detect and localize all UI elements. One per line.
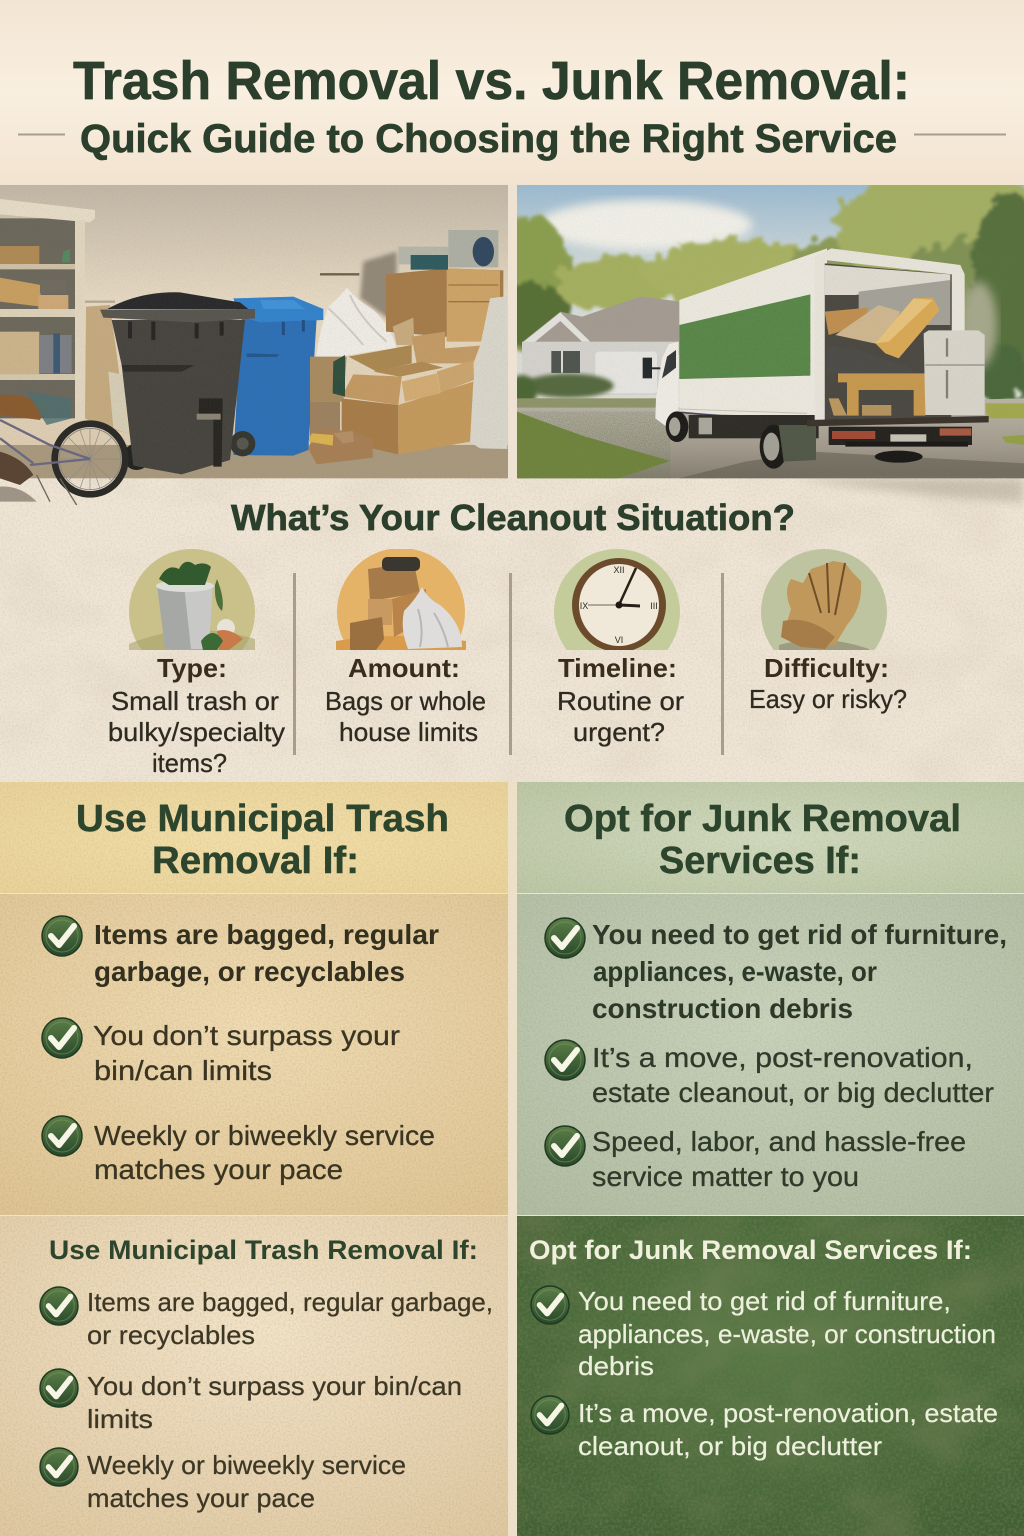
subtitle: Quick Guide to Choosing the Right Service [80, 117, 897, 161]
header band [0, 0, 1024, 186]
item: move: estate cleanout, or big declutter [592, 1077, 994, 1108]
item: bagged: garbage, or recyclables [94, 956, 405, 987]
panel: junk heading [517, 782, 1024, 893]
panel: municipal heading [0, 782, 508, 893]
icon: clock: IX [580, 601, 588, 611]
divider [721, 573, 724, 755]
label: difficulty: Easy or risky? [749, 684, 907, 714]
item: speed: Speed, labor, and hassle-free [592, 1126, 966, 1157]
road [517, 398, 1024, 478]
panel: junk heading: Opt for Junk Removal [564, 798, 961, 840]
item: speed: service matter to you [592, 1161, 859, 1192]
panel: junk list [517, 894, 1024, 1215]
item: furniture: You need to get rid of furniture, [578, 1286, 951, 1316]
icon: clock: XII [613, 565, 625, 575]
label: timeline: Timeline: [558, 653, 677, 683]
mattress [470, 296, 508, 449]
column gutter [508, 782, 517, 1536]
icon: clock: VI [615, 635, 623, 645]
deck and rear lights [807, 416, 989, 426]
item: limits [40, 1369, 462, 1434]
white bag [316, 288, 397, 358]
black bin [127, 444, 144, 470]
fridge [924, 330, 985, 415]
item: bagged [42, 916, 439, 987]
icon: clock: III [650, 601, 658, 611]
truck cab [655, 342, 679, 428]
label: amount: Bags or whole [325, 686, 486, 716]
item: move [545, 1040, 994, 1108]
item: bagged [40, 1287, 493, 1350]
item: schedule: matches your pace [94, 1154, 343, 1185]
item: move: It’s a move, post-renovation, estate [578, 1398, 998, 1428]
filing cabinet [386, 268, 503, 342]
bicycle [0, 420, 125, 505]
item: furniture: appliances, e-waste, or construction [578, 1319, 996, 1349]
item: schedule: matches your pace [87, 1483, 315, 1513]
label: amount [325, 653, 486, 747]
label: timeline [557, 653, 684, 747]
label: amount: Amount: [348, 653, 460, 683]
photo: trash bins and clutter [0, 185, 512, 505]
house [522, 297, 680, 355]
situation background [0, 478, 1024, 782]
summary heading: Opt for Junk Removal Services If: [529, 1235, 972, 1265]
item: furniture: debris [578, 1351, 654, 1381]
label: type [108, 653, 285, 778]
item: furniture [531, 1286, 996, 1381]
label: timeline: Routine or [557, 686, 684, 716]
label: type: bulky/specialty [108, 717, 285, 747]
label: difficulty [749, 653, 907, 714]
item: move: It’s a move, post-renovation, [592, 1042, 973, 1073]
planks [85, 305, 127, 433]
item: schedule [42, 1116, 435, 1185]
item: move [531, 1396, 998, 1461]
item: limits: limits [87, 1404, 153, 1434]
panel: junk heading: Services If: [659, 840, 861, 882]
summary heading: Use Municipal Trash Removal If: [49, 1235, 478, 1265]
item: bagged: Items are bagged, regular garbage, [87, 1287, 493, 1317]
chassis and wheels [689, 415, 819, 438]
item: furniture: construction debris [592, 993, 853, 1024]
icon: work gloves [761, 549, 887, 650]
label: type: Type: [157, 653, 227, 683]
icon: clock [554, 549, 680, 650]
cargo opening [825, 263, 951, 422]
item: schedule [40, 1448, 406, 1513]
item: furniture [545, 918, 1007, 1024]
item: furniture: You need to get rid of furniture, [592, 919, 1007, 950]
grass texture on truck side panel [679, 294, 811, 380]
item: limits [42, 1018, 400, 1086]
shelf [0, 218, 77, 418]
panel: municipal summary [0, 1216, 508, 1536]
boxes [310, 357, 347, 402]
label: type: items? [152, 748, 227, 778]
panel: municipal heading: Removal If: [152, 840, 359, 882]
icon: trash can [129, 549, 255, 650]
divider [509, 573, 512, 755]
photo: junk removal truck [517, 185, 1024, 478]
item: move: cleanout, or big declutter [578, 1431, 882, 1461]
bricks [308, 428, 373, 464]
divider [293, 573, 296, 755]
section heading: cleanout situation: What’s Your Cleanout Situation? [231, 497, 795, 538]
blue bin [233, 318, 317, 456]
item: limits: bin/can limits [94, 1055, 272, 1086]
label: difficulty: Difficulty: [764, 653, 889, 683]
road shadow below photo [790, 478, 1024, 503]
item: furniture: appliances, e-waste, or [593, 956, 877, 987]
item: schedule: Weekly or biweekly service [87, 1450, 406, 1480]
panel: municipal heading: Use Municipal Trash [76, 798, 449, 840]
item: speed [545, 1126, 966, 1192]
label: timeline: urgent? [573, 717, 665, 747]
title: Trash Removal vs. Junk Removal: [73, 51, 910, 111]
item: bagged: or recyclables [87, 1320, 255, 1350]
item: limits: You don’t surpass your bin/can [87, 1371, 462, 1401]
icon: boxes and bag [336, 549, 466, 650]
truck box side [679, 248, 827, 422]
item: schedule: Weekly or biweekly service [94, 1120, 435, 1151]
item: limits: You don’t surpass your [93, 1020, 400, 1051]
panel: junk summary [517, 1216, 1024, 1536]
item: bagged: Items are bagged, regular [94, 919, 439, 950]
label: type: Small trash or [111, 686, 279, 716]
label: amount: house limits [339, 717, 478, 747]
panel: municipal list [0, 894, 508, 1215]
